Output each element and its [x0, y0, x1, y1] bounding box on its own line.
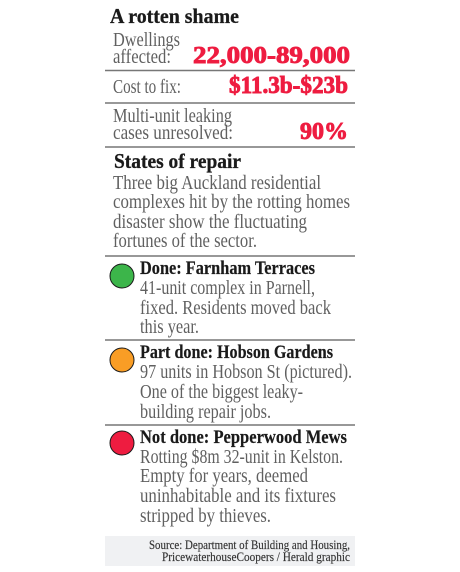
icon: red status circle	[110, 431, 134, 455]
intro text: Three big Auckland residential	[113, 173, 321, 194]
intro text: disaster show the fluctuating	[113, 212, 307, 233]
intro text	[113, 173, 350, 252]
item: done: Done: Farnham Terraces	[140, 259, 315, 279]
stat: dwellings affected: affected:	[113, 47, 171, 68]
item: done: 41-unit complex in Parnell,	[140, 278, 315, 299]
item: not done	[110, 428, 347, 527]
stat: multi-unit cases unresolved: 90%	[300, 119, 348, 145]
stat: cost to fix: Cost to fix:	[113, 77, 181, 98]
item: part done: One of the biggest leaky-	[140, 382, 303, 403]
item: not done: uninhabitable and its fixtures	[140, 486, 336, 507]
item: part done: building repair jobs.	[140, 402, 271, 423]
stat: dwellings affected	[113, 30, 350, 69]
item: not done: stripped by thieves.	[140, 506, 271, 527]
item: not done: Rotting $8m 32-unit in Kelston.	[140, 447, 343, 468]
stat: multi-unit cases unresolved	[113, 106, 348, 145]
item: done: this year.	[140, 317, 199, 338]
item: not done: Empty for years, deemed	[140, 466, 308, 487]
item: not done: Not done: Pepperwood Mews	[140, 428, 347, 448]
item: part done: 97 units in Hobson St (pictured).	[140, 362, 352, 383]
item: part done: Part done: Hobson Gardens	[140, 343, 333, 363]
stat: cost to fix: $11.3b-$23b	[229, 73, 348, 99]
icon: orange status circle	[110, 348, 134, 372]
stat: multi-unit cases unresolved: Multi-unit leaking	[113, 106, 232, 127]
item: part done	[110, 343, 352, 423]
title: A rotten shame	[110, 4, 239, 28]
icon: green status circle	[110, 264, 134, 288]
source credit	[105, 536, 355, 566]
intro text: complexes hit by the rotting homes	[113, 192, 350, 213]
source credit: Source: Department of Building and Housing,	[149, 538, 350, 552]
heading: states of repair: States of repair	[114, 149, 241, 173]
stat: dwellings affected: Dwellings	[113, 30, 180, 51]
stat: dwellings affected: 22,000-89,000	[193, 43, 350, 69]
item: done	[110, 259, 331, 338]
item: done: fixed. Residents moved back	[140, 298, 331, 319]
stat: multi-unit cases unresolved: cases unresolved:	[113, 123, 233, 144]
stat: cost to fix	[113, 73, 348, 99]
source credit: PricewaterhouseCoopers / Herald graphic	[162, 550, 350, 564]
intro text: fortunes of the sector.	[113, 231, 257, 252]
